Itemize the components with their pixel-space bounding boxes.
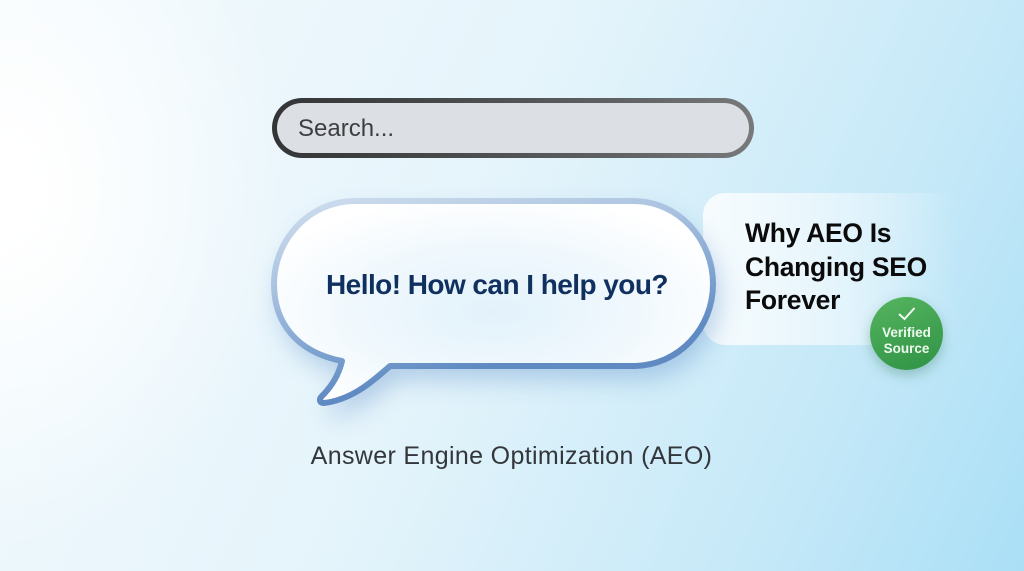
icon: check mark bbox=[898, 307, 916, 320]
heading: article title: Changing SEO bbox=[745, 252, 927, 282]
badge text: Source bbox=[884, 340, 929, 356]
badge text: Verified bbox=[882, 325, 931, 340]
search bar bbox=[272, 98, 754, 158]
heading: article title: Why AEO Is bbox=[745, 218, 891, 248]
search bar: Search... bbox=[298, 115, 394, 142]
badge: verified source bbox=[870, 297, 943, 370]
bubble text: Hello! How can I help you? bbox=[326, 269, 668, 300]
speech bubble bbox=[267, 198, 732, 424]
heading: article title bbox=[745, 218, 927, 315]
heading: article title: Forever bbox=[745, 285, 840, 315]
panel: article card bbox=[703, 193, 958, 345]
badge text bbox=[882, 325, 931, 356]
caption: Answer Engine Optimization (AEO) bbox=[311, 442, 712, 470]
